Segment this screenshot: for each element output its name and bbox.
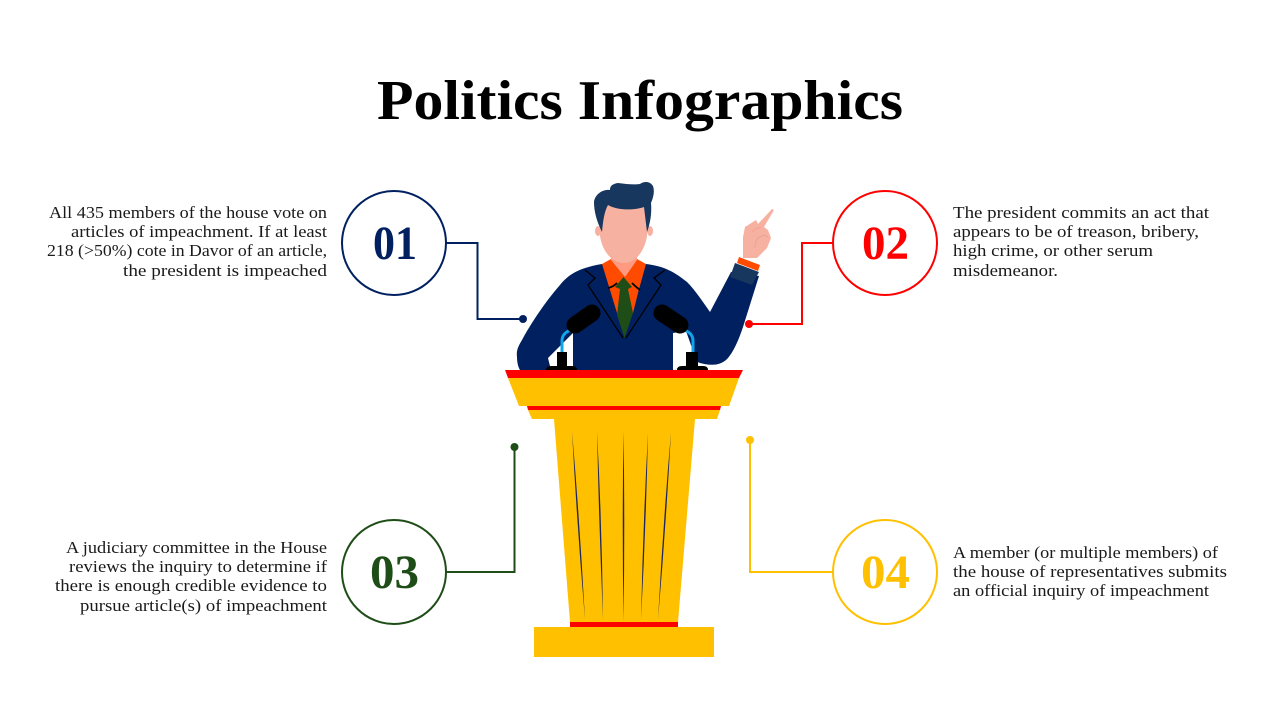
neck (611, 257, 637, 277)
callout 04: 04 (861, 546, 910, 599)
lapels (585, 270, 665, 338)
shirt (602, 259, 646, 330)
tie (615, 277, 633, 338)
podium (505, 370, 743, 657)
collar shadow (608, 283, 640, 290)
text block 01: All 435 members of the house vote on (49, 203, 327, 222)
callout 01 (342, 191, 527, 323)
face (600, 205, 647, 263)
text block 03: there is enough credible evidence to (55, 576, 327, 595)
title: Politics Infographics (377, 70, 903, 132)
text block 04: an official inquiry of impeachment (953, 581, 1209, 600)
sleeve band (730, 263, 759, 285)
microphone right (662, 313, 708, 370)
text block 03: pursue article(s) of impeachment (80, 596, 327, 615)
callout 02: 02 (862, 217, 909, 270)
microphone left (546, 313, 592, 370)
callout 03: 03 (370, 546, 419, 599)
callout 02 (745, 191, 937, 328)
text block 02: high crime, or other serum (953, 241, 1153, 260)
text block 03: reviews the inquiry to determine if (69, 557, 328, 576)
politician figure (517, 182, 774, 370)
text block 04: A member (or multiple members) of (953, 543, 1219, 562)
text block 04: the house of representatives submits (953, 562, 1227, 581)
cuff (737, 257, 760, 271)
hair (594, 182, 654, 232)
text block 01: 218 (>50%) cote in Davor of an article, (47, 241, 327, 260)
suit (517, 264, 759, 370)
callout 03 (342, 443, 518, 624)
text block 02: misdemeanor. (953, 261, 1058, 280)
text block 01: articles of impeachment. If at least (71, 222, 327, 241)
text block 02: The president commits an act that (953, 203, 1209, 222)
text block 03: A judiciary committee in the House (66, 538, 327, 557)
callout 04 (746, 436, 937, 624)
arm gaps (548, 333, 573, 370)
text block 02 (953, 203, 1209, 280)
text block 01: the president is impeached (123, 261, 328, 280)
text block 04 (953, 543, 1227, 600)
ears (595, 226, 601, 236)
hand (743, 209, 774, 258)
callout 01: 01 (373, 217, 417, 270)
text block 01 (47, 203, 328, 280)
text block 03 (55, 538, 328, 615)
text block 02: appears to be of treason, bribery, (953, 222, 1199, 241)
